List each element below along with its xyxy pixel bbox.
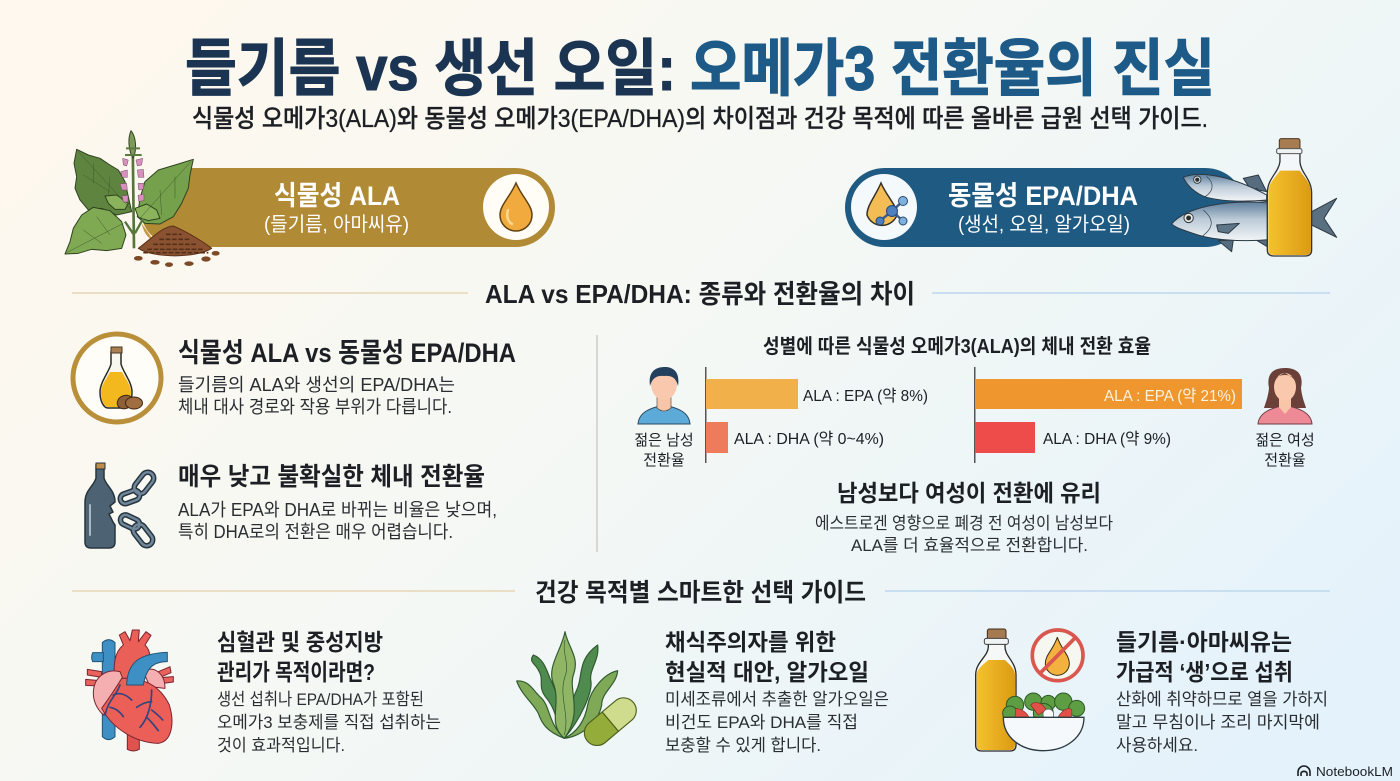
chart conclusion body — [815, 514, 1113, 555]
body text — [665, 690, 889, 755]
body text: 산화에 취약하므로 열을 가하지 — [1116, 690, 1328, 709]
body text: 생선 섭취나 EPA/DHA가 포함된 — [217, 690, 424, 709]
icon: broken bottle and chain — [85, 463, 156, 548]
heading: 채식주의자를 위한 — [665, 629, 836, 655]
title: 들기름 vs 생선 오일: — [185, 35, 676, 104]
heading: 현실적 대안, 알가오일 — [665, 659, 869, 685]
banner subheading: (들기름, 아마씨유) — [264, 213, 409, 236]
icon: oil bottle, no-heat sign and salad — [976, 629, 1085, 751]
heading — [665, 629, 869, 685]
body text: 미세조류에서 추출한 알가오일은 — [665, 690, 889, 709]
icon: algae and capsule — [517, 632, 641, 751]
icon: young woman — [1258, 368, 1312, 424]
woman caption: 전환율 — [1264, 452, 1306, 469]
man caption: 전환율 — [643, 452, 685, 469]
body text: 보충할 수 있게 합니다. — [665, 736, 821, 755]
bar label: ALA : DHA (약 0~4%) — [734, 430, 884, 448]
body text: 특히 DHA로의 전환은 매우 어렵습니다. — [178, 522, 453, 542]
woman caption — [1255, 432, 1315, 469]
body text: 말고 무침이나 조리 마지막에 — [1116, 713, 1320, 732]
icon: oil flask with nuts — [73, 334, 161, 422]
chart title: 성별에 따른 식물성 오메가3(ALA)의 체내 전환 효율 — [763, 335, 1151, 358]
banner heading: 식물성 ALA — [274, 181, 400, 211]
icon: young man — [638, 367, 690, 424]
NotebookLM mark: NotebookLM — [1316, 764, 1393, 779]
title — [185, 35, 1215, 104]
body text: 오메가3 보충제를 직접 섭취하는 — [217, 713, 441, 732]
body text: 사용하세요. — [1116, 736, 1198, 755]
heading: 식물성 ALA vs 동물성 EPA/DHA — [178, 338, 516, 368]
bar label: ALA : DHA (약 9%) — [1043, 430, 1171, 448]
banner subheading: (생선, 오일, 알가오일) — [958, 213, 1130, 236]
banner: plant ALA — [140, 168, 555, 247]
icon: heart — [86, 630, 173, 751]
chart conclusion heading: 남성보다 여성이 전환에 유리 — [837, 480, 1101, 506]
axis and bars: female — [974, 367, 1242, 463]
body text: 것이 효과적입니다. — [217, 736, 345, 755]
heading: 심혈관 및 중성지방 — [217, 629, 383, 655]
chart conclusion body: ALA를 더 효율적으로 전환합니다. — [851, 536, 1088, 555]
heading: 가급적 ‘생’으로 섭취 — [1116, 659, 1293, 685]
body text — [178, 375, 455, 417]
heading — [1116, 629, 1293, 685]
panel: vegetarian — [517, 629, 889, 755]
body text: ALA가 EPA와 DHA로 바뀌는 비율은 낮으며, — [178, 500, 497, 520]
icon: oil drop — [483, 174, 549, 240]
bar label: ALA : EPA (약 8%) — [803, 387, 928, 405]
panel: cardiovascular — [86, 629, 441, 755]
icon: fish and oil bottle — [1172, 139, 1337, 256]
body text — [1116, 690, 1328, 755]
man caption — [634, 432, 694, 469]
panel: ALA vs EPA/DHA text items — [73, 334, 516, 548]
section divider heading: ALA vs EPA/DHA: ALA vs EPA/DHA: 종류와 전환율의 차이 — [485, 279, 915, 309]
body text: 체내 대사 경로와 작용 부위가 다릅니다. — [178, 397, 452, 417]
panel: conversion chart — [634, 335, 1315, 555]
bar label: ALA : EPA (약 21%) — [1104, 387, 1236, 405]
subtitle: 식물성 오메가3(ALA)와 동물성 오메가3(EPA/DHA)의 차이점과 건강 목적에 따른 올바른 급원 선택 가이드. — [192, 105, 1208, 133]
banner: animal EPA/DHA — [845, 168, 1245, 247]
man caption: 젊은 남성 — [634, 432, 694, 449]
icon: perilla plant and seeds — [65, 131, 220, 267]
body text — [217, 690, 441, 755]
woman caption: 젊은 여성 — [1255, 432, 1315, 449]
heading: 매우 낮고 불확실한 체내 전환율 — [178, 463, 485, 491]
body text: 비건도 EPA와 DHA를 직접 — [665, 713, 858, 732]
icon: drop with molecule — [851, 174, 917, 240]
heading: 들기름·아마씨유는 — [1116, 629, 1292, 655]
banner heading: 동물성 EPA/DHA — [948, 181, 1138, 211]
chart conclusion body: 에스트로겐 영향으로 폐경 전 여성이 남성보다 — [815, 514, 1113, 533]
section divider heading: guide: 건강 목적별 스마트한 선택 가이드 — [535, 579, 866, 607]
body text: 들기름의 ALA와 생선의 EPA/DHA는 — [178, 375, 455, 395]
heading: 관리가 목적이라면? — [217, 659, 375, 685]
title: 오메가3 전환율의 진실 — [690, 35, 1215, 104]
panel: raw use — [976, 629, 1328, 755]
axis and bars: male — [705, 367, 798, 463]
body text — [178, 500, 497, 542]
heading — [217, 629, 383, 685]
